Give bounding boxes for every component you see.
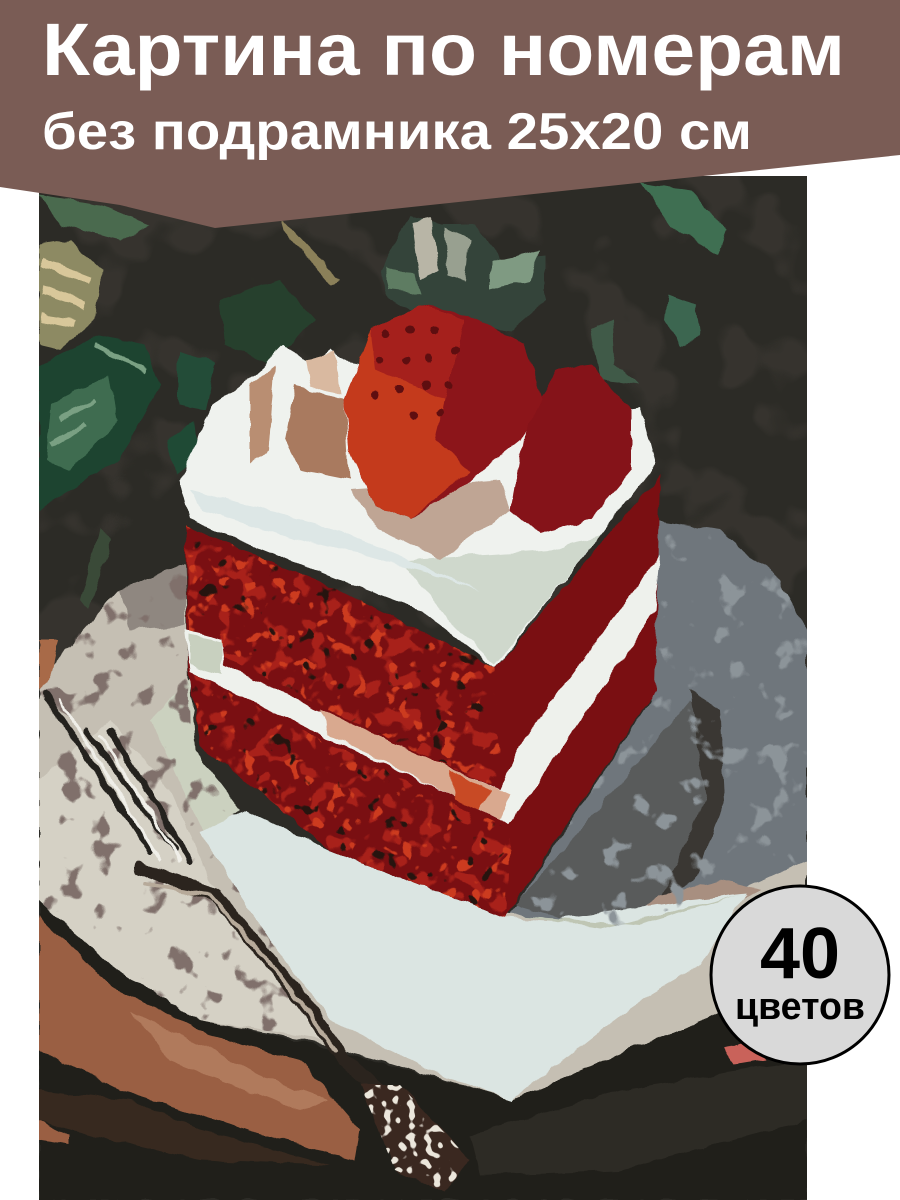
table and dark foreground — [39, 900, 807, 1200]
strawberries — [345, 305, 632, 535]
header banner — [0, 0, 900, 228]
badge: 40 colours: цветов — [735, 986, 865, 1028]
plate white slice — [200, 810, 745, 1100]
cream middle layer — [185, 555, 660, 825]
painting: strawberry cake — [39, 176, 810, 1200]
badge: 40 colours — [711, 886, 889, 1064]
fork handle end — [364, 1085, 459, 1188]
plate blotches — [39, 510, 810, 1060]
cream top — [180, 345, 655, 668]
strawberry leaves — [380, 215, 640, 385]
subtitle: без подрамника 25х20 см — [42, 103, 752, 161]
cake — [180, 345, 660, 920]
fork — [45, 695, 470, 1192]
plate — [39, 520, 807, 1100]
foliage left — [39, 182, 727, 610]
sponge texture — [180, 520, 520, 920]
title: Картина по номерам — [42, 8, 845, 91]
badge: 40 colours: 40 — [760, 914, 840, 994]
